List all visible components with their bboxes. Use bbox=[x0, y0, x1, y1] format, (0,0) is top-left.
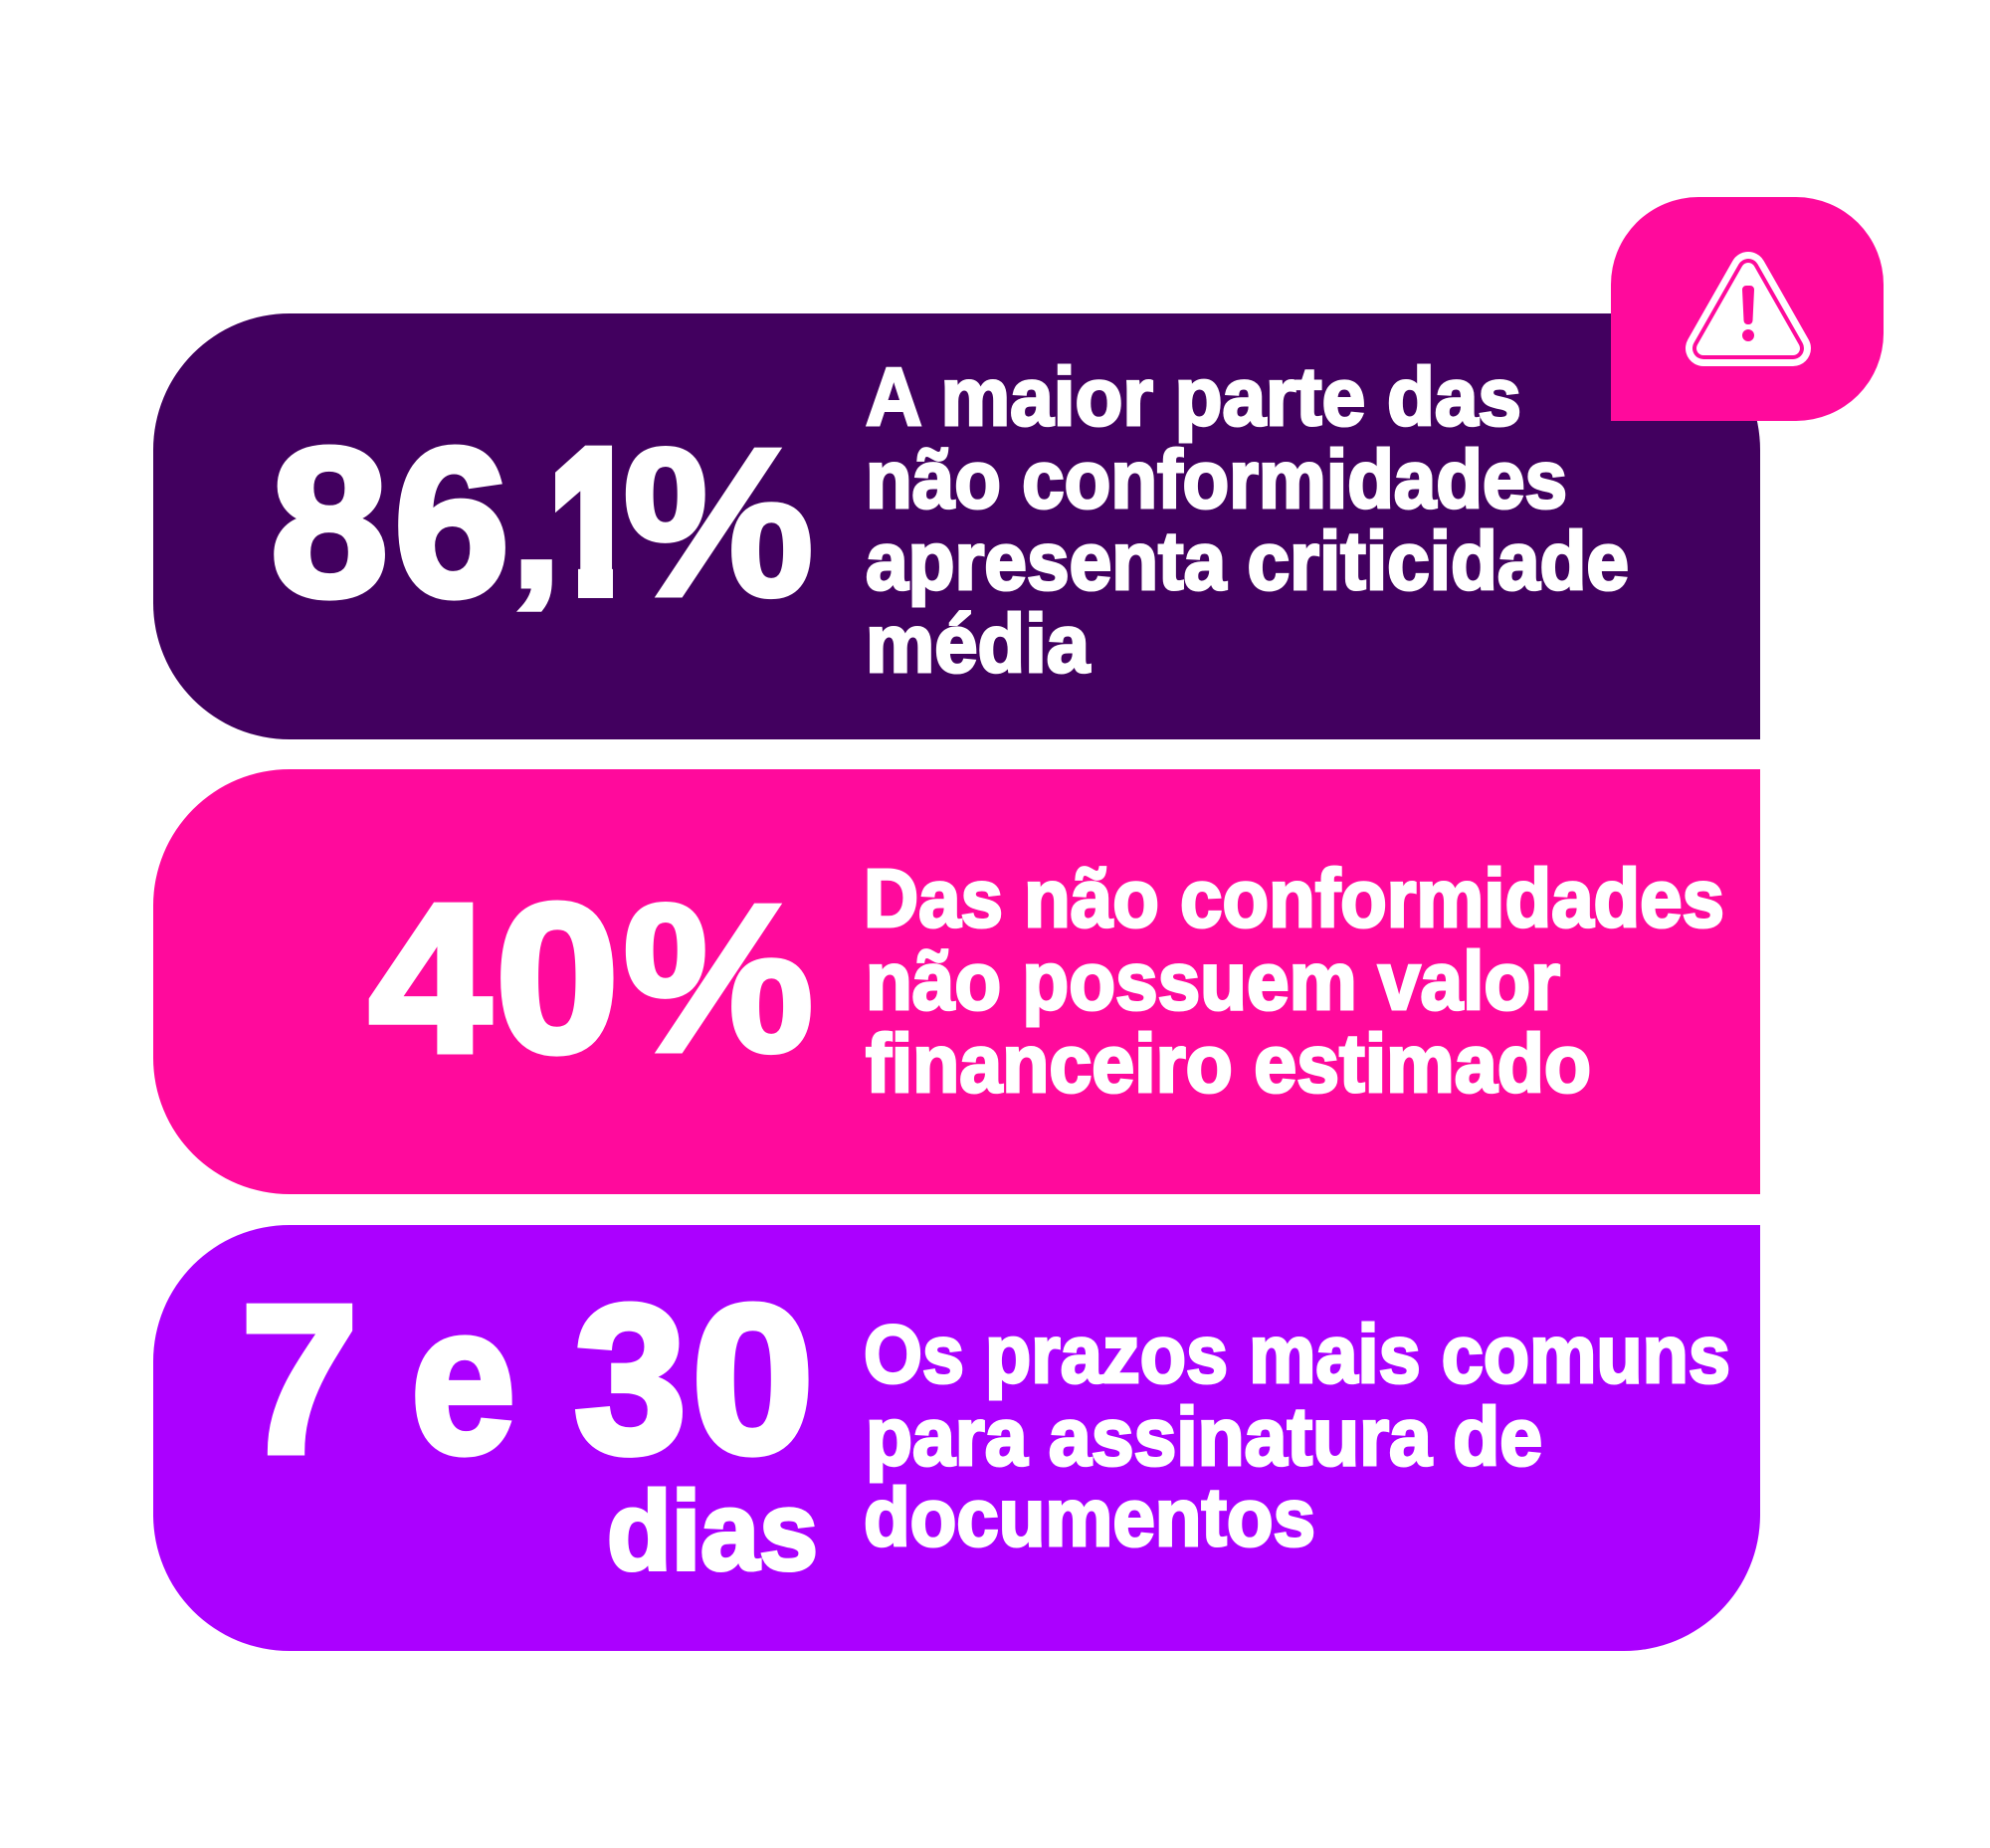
number: 86,1%: 6 bbox=[394, 404, 509, 640]
panel: 40% bbox=[153, 769, 1760, 1194]
number: 40%: 0 bbox=[496, 860, 619, 1096]
description: prazos de assinatura: Os prazos mais comuns bbox=[864, 1308, 1730, 1400]
icon: warning triangle bbox=[1703, 270, 1793, 348]
number: 7 e 30 bbox=[241, 1261, 814, 1497]
number: 86,1%: 1 bbox=[550, 407, 635, 643]
description: média criticidade: média bbox=[866, 597, 1091, 690]
number: 7 e 30: e bbox=[411, 1261, 515, 1497]
description: média criticidade: não conformidades bbox=[866, 433, 1567, 525]
number: 40%: 4 bbox=[369, 860, 491, 1096]
description: prazos de assinatura: documentos bbox=[864, 1471, 1315, 1563]
description: prazos de assinatura bbox=[864, 1308, 1730, 1563]
panel: 86,1% bbox=[153, 313, 1760, 739]
number: 7 e 30: 3 bbox=[574, 1261, 687, 1497]
description: média criticidade bbox=[866, 350, 1629, 690]
number: 86,1%: % bbox=[623, 404, 814, 640]
number: 40% bbox=[369, 860, 814, 1096]
number: 7 e 30: 0 bbox=[692, 1261, 814, 1497]
description: sem valor financeiro: não possuem valor bbox=[866, 934, 1560, 1027]
number: 86,1%: 8 bbox=[271, 404, 388, 640]
number: 40%: % bbox=[623, 860, 814, 1096]
label: dias: dias bbox=[607, 1469, 818, 1593]
icon badge: warning bbox=[1611, 197, 1884, 421]
number: 86,1% bbox=[274, 444, 811, 612]
panel: 7 e 30 dias bbox=[153, 1225, 1760, 1651]
description: sem valor financeiro bbox=[864, 852, 1724, 1110]
number: 7 e 30: 7 bbox=[241, 1261, 358, 1497]
description: média criticidade: A maior parte das bbox=[866, 350, 1521, 443]
description: média criticidade: apresenta criticidade bbox=[866, 514, 1629, 607]
description: prazos de assinatura: para assinatura de bbox=[866, 1390, 1542, 1483]
description: sem valor financeiro: financeiro estimado bbox=[866, 1017, 1591, 1110]
description: sem valor financeiro: Das não conformidades bbox=[864, 852, 1724, 944]
number: 86,1%: , bbox=[513, 450, 559, 617]
